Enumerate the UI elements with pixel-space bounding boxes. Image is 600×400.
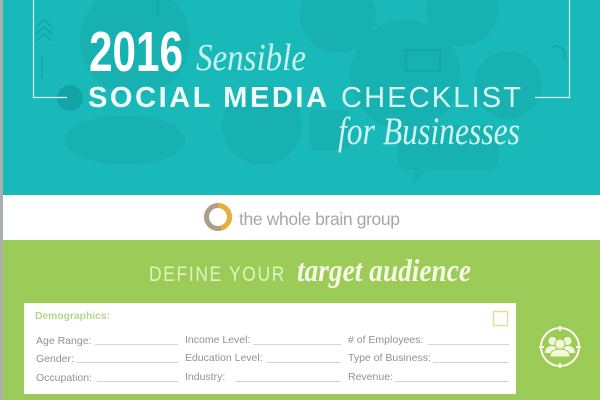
checkbox (494, 312, 508, 326)
form column: left (36, 335, 178, 384)
title: for businesses: for Businesses (338, 110, 520, 153)
title: year: 2016 (89, 20, 183, 84)
left edge strip (0, 0, 3, 400)
panel: logo band (0, 195, 600, 240)
form column: right: Revenue: (348, 371, 393, 383)
form column: middle (185, 334, 341, 383)
form column: right (348, 334, 509, 383)
title: sensible: Sensible (196, 37, 306, 79)
panel: demographics form (24, 303, 516, 394)
logo text: the whole brain group (239, 209, 400, 229)
form column: left: Occupation: (36, 372, 92, 384)
panel: teal header (0, 0, 600, 195)
title frame (34, 0, 570, 98)
title (88, 20, 521, 153)
form column: right: Type of Business: (348, 352, 431, 364)
heading: define your: DEFINE YOUR (149, 263, 286, 286)
heading (149, 252, 471, 288)
form column: middle: Income Level: (185, 334, 250, 346)
form column: middle: Industry: (185, 371, 225, 383)
title: checklist: CHECKLIST (341, 82, 521, 114)
background: faded social media icons (65, 0, 542, 186)
form heading: Demographics: (35, 311, 110, 322)
logo (206, 206, 400, 229)
icon: target audience people (539, 326, 581, 368)
form column: left: Age Range: (36, 335, 91, 347)
icon: logo ring (206, 206, 230, 228)
icon: pie circle on frame (57, 85, 83, 111)
title: social media: SOCIAL MEDIA (88, 82, 327, 114)
heading: target audience: target audience (297, 252, 471, 288)
panel: green section (0, 240, 600, 400)
form column: left: Gender: (36, 353, 74, 365)
form column: right: # of Employees: (348, 334, 423, 346)
form column: middle: Education Level: (185, 352, 263, 364)
